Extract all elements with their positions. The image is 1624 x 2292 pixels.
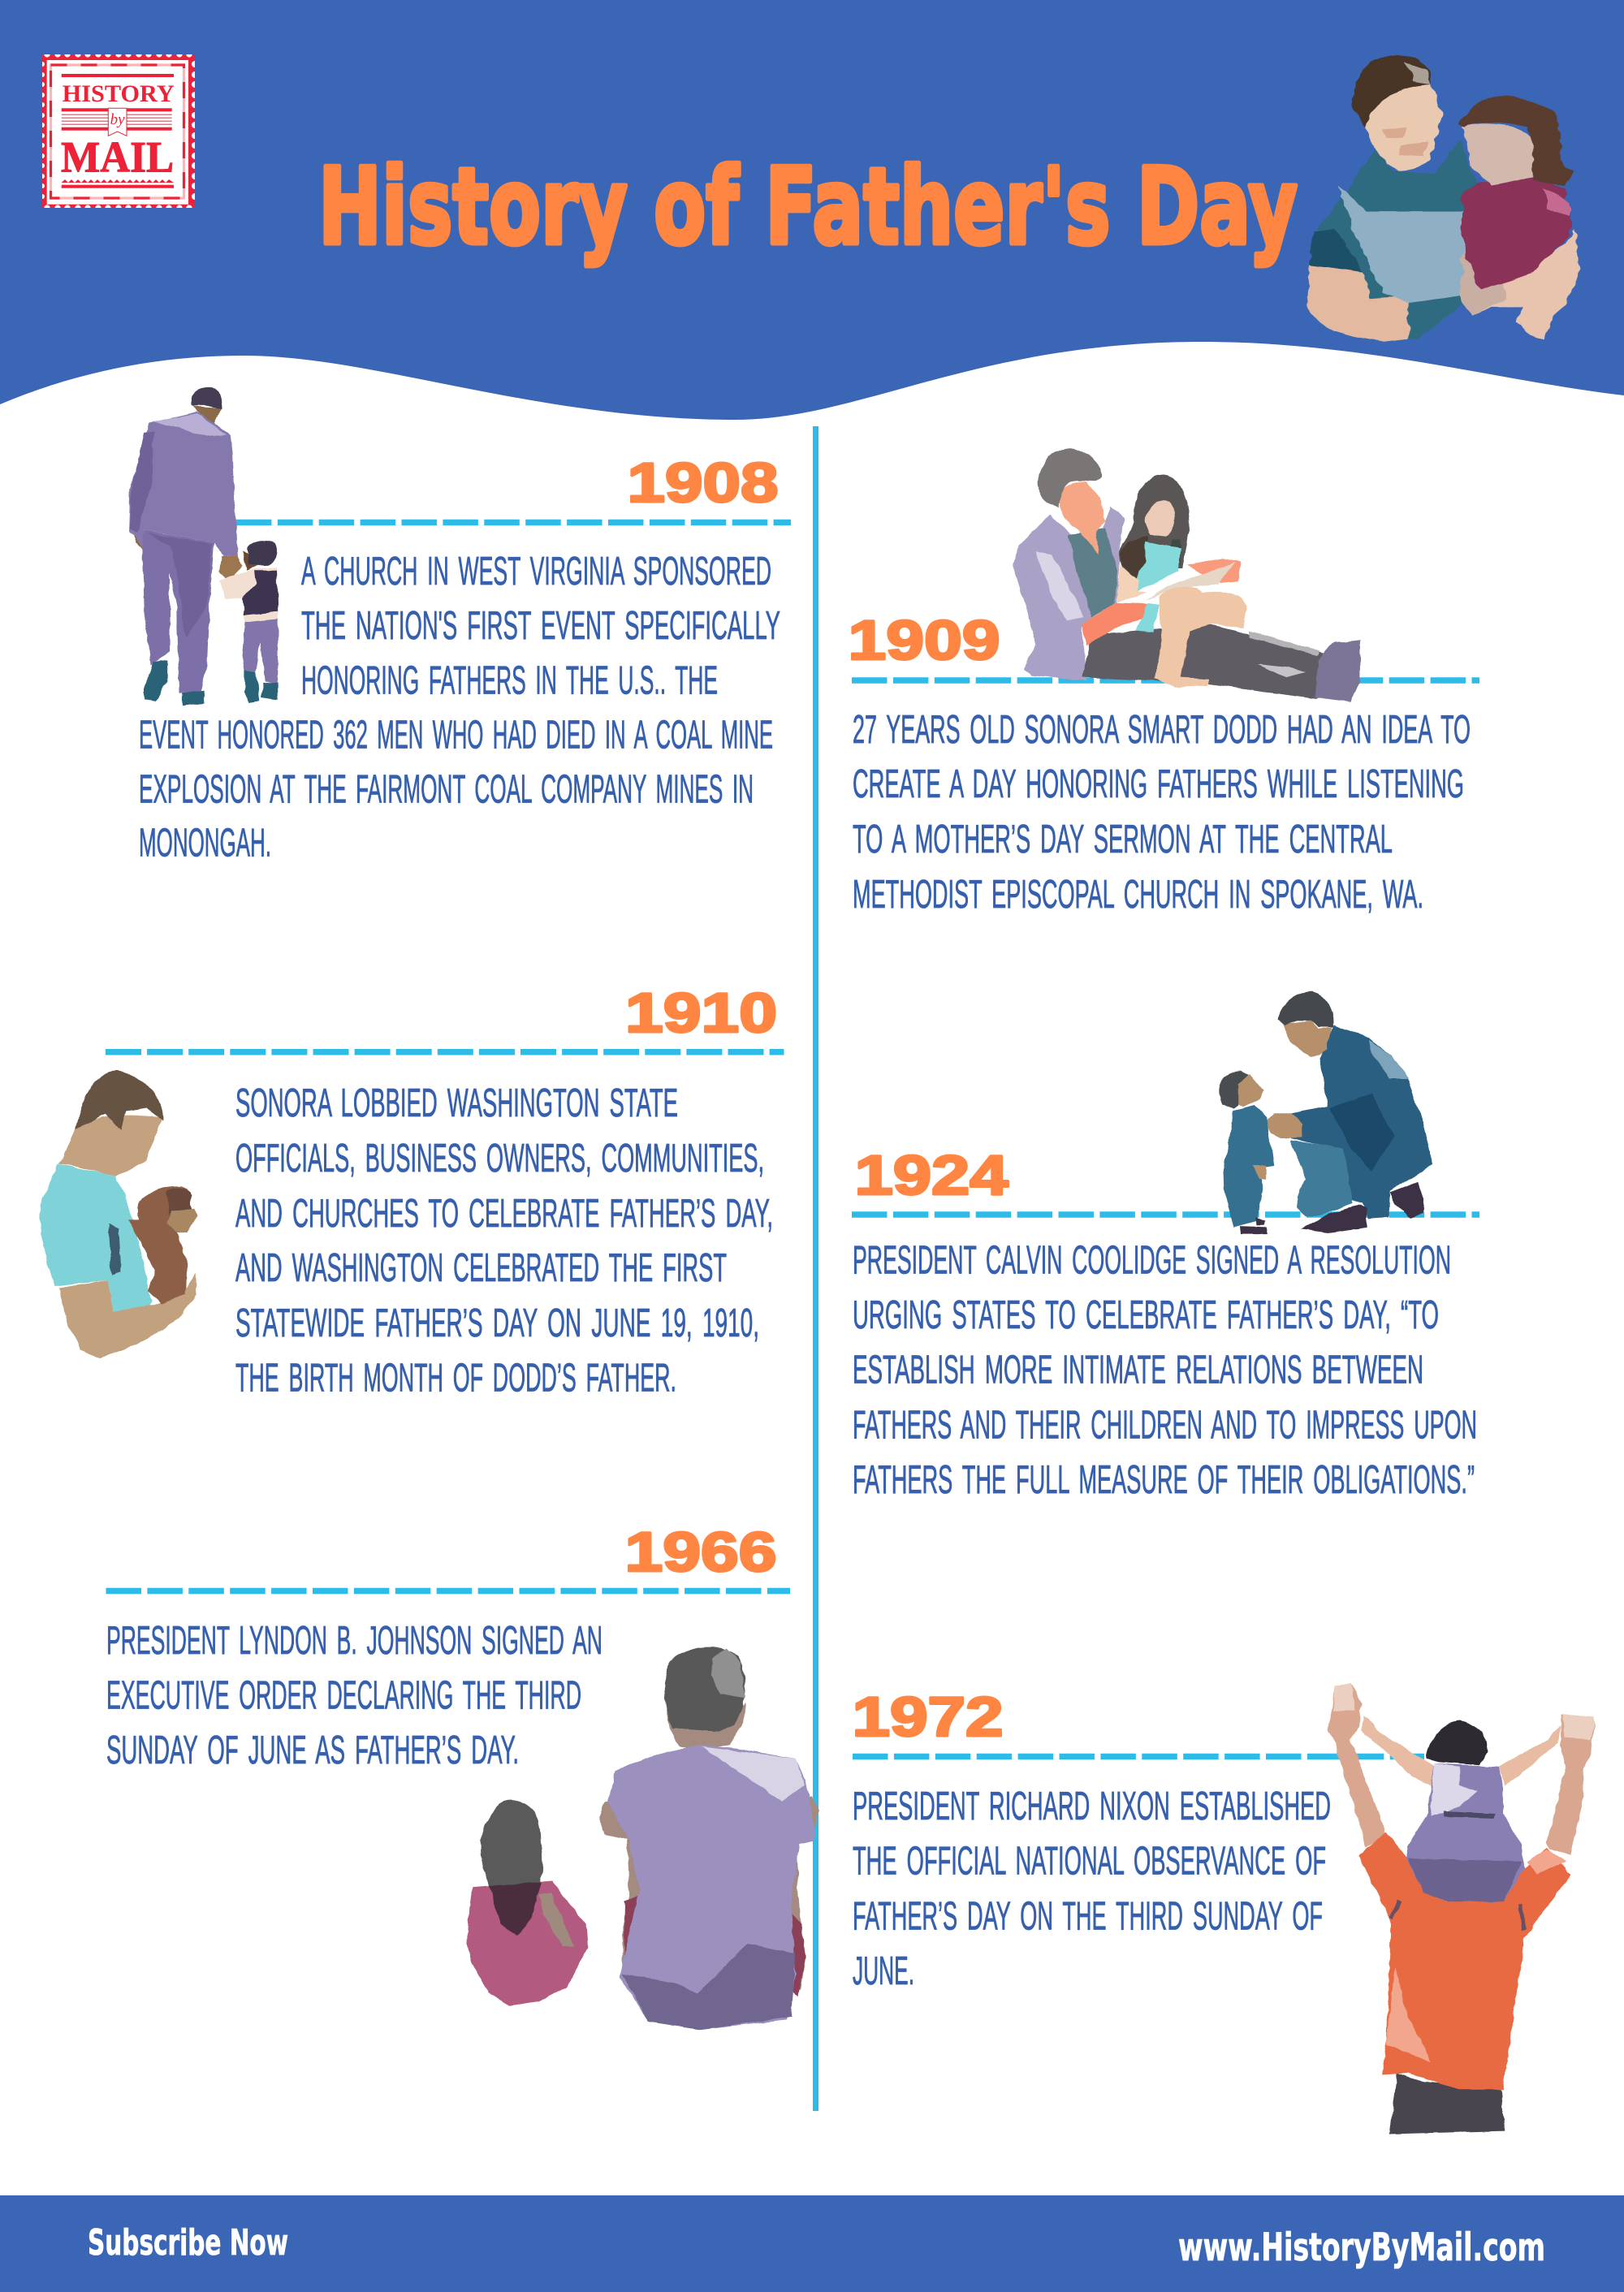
footer band [0,2195,1624,2292]
text: 1908 event [139,549,780,865]
panel: 1924 [852,991,1479,1502]
text: 1966 event: EXECUTIVE ORDER DECLARING THE THIRD [106,1673,581,1718]
panel: 1966 [106,1521,819,2030]
icon: father and daughter reading [1307,54,1579,342]
text: 1910 event: SONORA LOBBIED WASHINGTON STATE [235,1081,678,1125]
text: 1910 event: THE BIRTH MONTH OF DODD’S FATHER. [235,1356,676,1400]
year 1972: 1972 [853,1686,1004,1748]
text: 1910 event: STATEWIDE FATHER’S DAY ON JUNE 19, 1910, [235,1301,759,1345]
icon: kneeling father with toddler [1220,991,1433,1234]
panel: 1910 [41,982,784,1400]
icon: child on father's shoulders [1328,1684,1594,2134]
year 1910: 1910 [625,982,777,1044]
text: 1908 event: MONONGAH. [139,820,271,865]
logo: History by Mail stamp [40,51,198,211]
text: 1908 event: HONORING FATHERS IN THE U.S.. THE [301,658,718,703]
timeline vertical line [813,426,818,2111]
panel: 1909 [848,449,1479,917]
logo: History by Mail stamp: MAIL [61,133,174,182]
text: 1908 event: A CHURCH IN WEST VIRGINIA SPONSORED [301,549,771,594]
logo: History by Mail stamp: by [110,111,125,128]
year 1908: 1908 [627,451,778,514]
header band with wave [0,0,1624,420]
icon: father and child seated from behind [467,1647,819,2030]
year 1924: 1924 [854,1144,1009,1206]
text: 1908 event: THE NATION'S FIRST EVENT SPECIFICALLY [301,603,780,648]
text: 1966 event [106,1618,603,1772]
text: 1910 event [235,1081,773,1400]
text: 1910 event: OFFICIALS, BUSINESS OWNERS, COMMUNITIES, [235,1136,764,1181]
text: 1972 event: JUNE. [853,1949,914,1993]
icon: father reading with daughter on lap [1013,449,1359,702]
panel: 1908 [129,387,791,865]
panel: 1972 [853,1684,1594,2134]
text: 1972 event [853,1784,1331,1993]
text: 1966 event: PRESIDENT LYNDON B. JOHNSON SIGNED AN [106,1618,603,1663]
text: 1910 event: AND WASHINGTON CELEBRATED THE FIRST [235,1245,727,1290]
footer: subscribe text: Subscribe Now [88,2222,288,2264]
year 1966: 1966 [625,1521,776,1583]
logo: History by Mail stamp: HISTORY [63,80,175,107]
text: 1910 event: AND CHURCHES TO CELEBRATE FATHER’S DAY, [235,1191,773,1236]
year 1909: 1909 [848,609,1000,671]
text: 1966 event: SUNDAY OF JUNE AS FATHER’S DAY. [106,1728,519,1772]
text: 1908 event: EXPLOSION AT THE FAIRMONT COAL COMPANY MINES IN [139,766,754,812]
icon: father and child walking [129,387,278,706]
text: 1908 event: EVENT HONORED 362 MEN WHO HAD DIED IN A COAL MINE [139,713,773,757]
icon: father holding baby [41,1071,197,1358]
text: 1909 event [853,707,1471,917]
text: 1924 event [853,1237,1477,1502]
